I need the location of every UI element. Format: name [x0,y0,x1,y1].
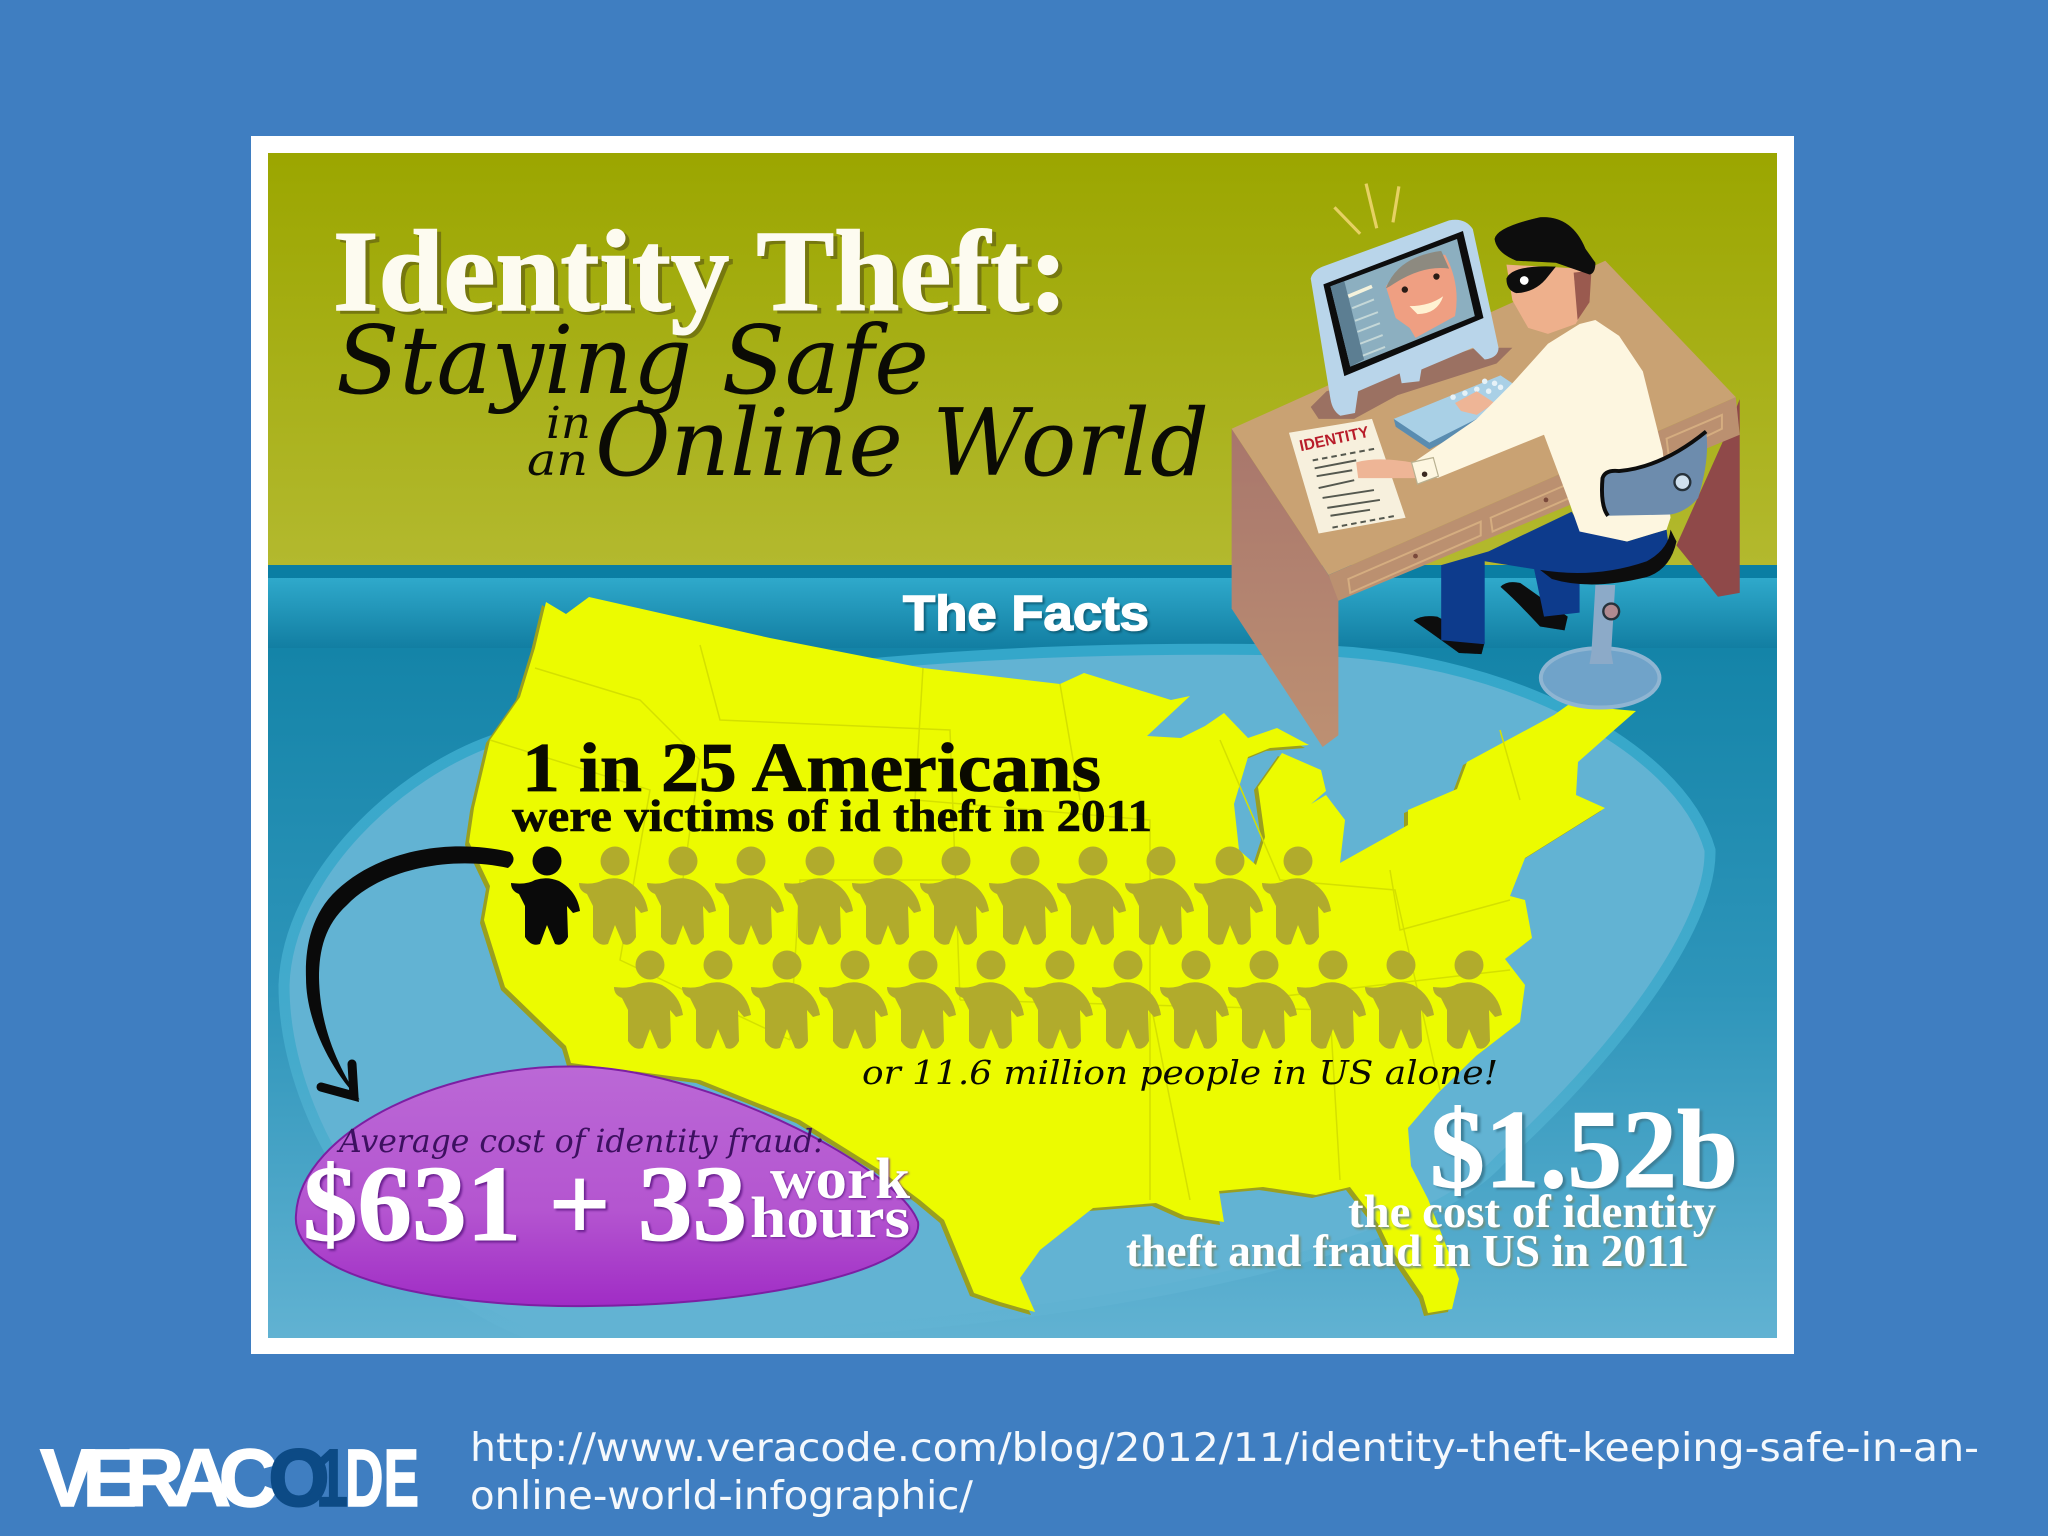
desk [1232,261,1740,747]
text: source URL: online-world-infographic/ [470,1474,974,1519]
text: hours: hours [750,1185,910,1250]
stool [1541,585,1659,708]
paper heading: IDENTITY [1298,424,1371,455]
pictogram: victim figure [511,846,580,945]
subtitle: Staying Safe: Staying Safe [336,306,929,416]
document: identity paper [1289,419,1406,534]
logo: Veracode [40,1433,419,1524]
stat: $1.52b: $1.52b [1430,1088,1738,1212]
text: theft and fraud: theft and fraud in US in 2011 [1126,1226,1689,1276]
text: source URL [470,1426,1979,1519]
chair back [1601,431,1707,516]
logo: Veracode: DE [345,1433,419,1524]
arrow: victim to cost [306,846,514,1100]
head [1495,217,1595,334]
sparks [1334,184,1399,234]
stat: $631 + 33: $631 + 33 [303,1145,747,1264]
subtitle: in an [527,398,591,486]
heading: 1 in 25 Americans: 1 in 25 Americans [522,730,1101,807]
text: 11.6 million people: or 11.6 million people in US alone! [862,1053,1498,1092]
seat [1540,530,1676,584]
text: work: work [770,1146,911,1211]
title: Identity Theft: Identity Theft: [333,208,1068,336]
hands [1356,391,1495,478]
text: were victims of id theft: were victims of id theft in 2011 [512,791,1152,841]
hair [1495,217,1595,275]
shoes [1414,582,1568,654]
logo: Veracode: 1 [316,1433,348,1524]
panel: olive header background [268,153,1777,565]
monitor [1311,220,1499,416]
mask [1506,266,1556,293]
subtitle: in an: in [546,398,591,449]
illustration: thief at desk [1232,184,1740,747]
text: average cost label: Average cost of identity fraud: [336,1122,824,1160]
trousers [1441,512,1669,644]
text: source URL: http://www.veracode.com/blog/2012/11/identity-theft-keeping-safe-in-an- [470,1426,1979,1471]
pictogram: second row of people [614,950,1502,1049]
logo: Veracode: VERAC [40,1433,278,1524]
monitor shadow [1311,348,1512,419]
keyboard [1394,375,1512,449]
heading: The Facts: The Facts [903,587,1149,641]
map: United States [465,597,1636,1316]
shirt [1412,320,1671,541]
subtitle: in an: an [527,435,588,486]
pictogram: first row of people [579,846,1331,945]
panel: infographic frame [251,136,1794,1354]
logo: Veracode: O [269,1433,329,1522]
callout: average cost oval [296,1067,918,1306]
text: the cost of identity: the cost of identity [1348,1186,1716,1238]
subtitle: Online World: Online World [595,389,1209,497]
panel: teal facts background [268,565,1777,1348]
